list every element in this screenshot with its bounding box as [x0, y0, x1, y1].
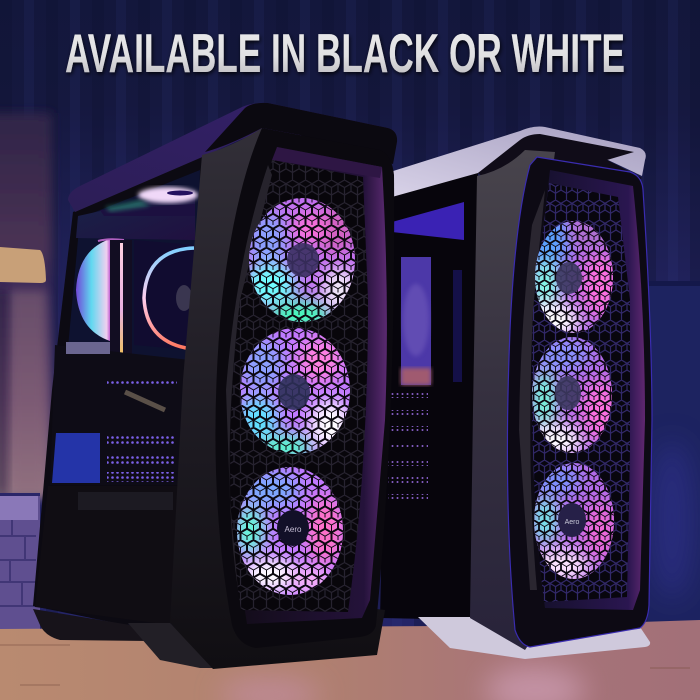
black case: fan bottom hub with logo — [277, 510, 309, 546]
black case: led strip — [120, 243, 123, 355]
white case: vents — [388, 392, 428, 500]
black case: top recess glow — [272, 147, 382, 178]
white case: fan top hub — [556, 262, 582, 294]
white case: glass window glow — [392, 202, 464, 240]
white case: top panel — [390, 126, 646, 197]
white case: fan middle — [532, 337, 612, 453]
left wall — [0, 113, 52, 498]
black case: top panel — [68, 103, 397, 212]
white case: side panel — [380, 172, 478, 620]
black case: top fan glow — [138, 187, 198, 203]
white case: fan bottom — [534, 463, 614, 579]
black case: graphics power cables — [125, 392, 165, 410]
white case: fan top — [535, 221, 613, 333]
black case: fan middle hub — [278, 374, 310, 410]
white case: recess — [533, 170, 645, 610]
white case: base foot — [418, 617, 650, 659]
white case: fan bottom hub with logo — [558, 503, 586, 537]
table — [0, 620, 700, 700]
white case: front strip — [470, 150, 555, 650]
white case — [380, 126, 652, 659]
lamp shade — [0, 247, 46, 283]
black case: feet — [33, 609, 150, 641]
white case: front bezel — [507, 157, 652, 647]
black case: fan bottom hub with logo: Aero — [285, 525, 302, 534]
black case: psu shroud — [35, 486, 178, 625]
black case: fan top — [249, 198, 355, 322]
black case: fan bottom — [235, 465, 347, 597]
black case: fan hub — [176, 285, 192, 311]
black case: front bezel — [215, 128, 394, 648]
black case: mesh — [230, 160, 368, 612]
white case: top underside — [478, 134, 642, 200]
black case: carbon strip — [226, 165, 272, 590]
black case: top overhang — [205, 103, 397, 164]
black case: cooler fan — [76, 239, 110, 341]
white case: carbon strip — [519, 190, 545, 590]
brick wall — [0, 493, 40, 630]
black case: blue motherboard panel — [52, 433, 100, 483]
black case: radiator block — [134, 240, 195, 350]
black case: front strip — [170, 128, 385, 669]
black case: cooler block — [110, 240, 132, 358]
black case: fan middle — [240, 328, 350, 454]
white case: interior screen — [401, 257, 462, 385]
black case: pci slots — [107, 380, 177, 482]
black case: side body — [33, 155, 205, 625]
white case: fan middle hub — [555, 376, 581, 410]
white case: fan bottom hub with logo: Aero — [565, 519, 579, 526]
black case: fan top hub — [287, 243, 319, 277]
black case: interior upper — [65, 170, 200, 380]
black case: base wedge — [128, 623, 215, 668]
black case — [33, 103, 397, 669]
white case: mesh — [532, 183, 630, 602]
black case: cooler arc top — [98, 239, 124, 241]
black case: rgb ring — [144, 248, 194, 348]
black case: recess — [233, 147, 387, 624]
black case: lower interior — [50, 342, 190, 485]
